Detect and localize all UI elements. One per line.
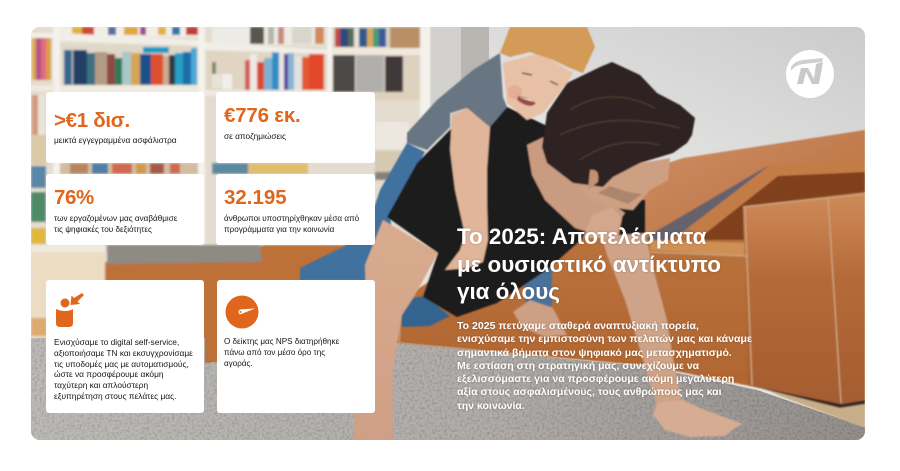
stat caption: άνθρωποι υποστηρίχθηκαν μέσα από (224, 214, 359, 223)
boy's jeans (300, 143, 425, 280)
rug (31, 338, 865, 440)
intro paragraph: σημαντικά βήματα στον ψηφιακό μας μετασχηματισμό. (457, 347, 732, 359)
body text (224, 337, 339, 368)
boy's t-shirt (407, 53, 507, 150)
intro paragraph: Το 2025 πετύχαμε σταθερά αναπτυξιακή πορεία, (457, 320, 699, 332)
heading (457, 224, 721, 304)
card: employees upskilled (46, 174, 204, 245)
stat caption: μεικτά εγγεγραμμένα ασφάλιστρα (54, 135, 177, 145)
stat caption: τις ψηφιακές του δεξιότητες (54, 225, 152, 234)
stat value: €776 εκ. (224, 104, 301, 127)
father's black t-shirt (387, 107, 645, 317)
card: NPS (217, 280, 375, 413)
stat caption (224, 214, 359, 234)
father's neck (527, 135, 625, 238)
body text: τις υποδομές μας με αυτοματισμούς, (54, 359, 189, 369)
stat caption: σε αποζημιώσεις (224, 131, 286, 141)
icon: orange gauge (226, 296, 258, 328)
intro paragraph: εξελισσόμαστε για να προσφέρουμε ακόμη μεγαλύτερη (457, 373, 734, 385)
body text: εξυπηρέτηση στους πελάτες μας. (54, 391, 176, 401)
father's arm left (353, 220, 438, 440)
card: claims paid (216, 92, 375, 163)
father's face (580, 158, 670, 210)
father's arm right (600, 225, 683, 405)
intro paragraph (456, 320, 752, 412)
body text: ταχύτερη και απλούστερη (54, 380, 148, 390)
card: people supported (216, 174, 375, 245)
stat caption: των εργαζομένων μας αναβάθμισε (54, 214, 177, 223)
stat caption: προγράμματα για την κοινωνία (224, 225, 334, 234)
bookshelf (31, 27, 430, 277)
body text: αξιοποιήσαμε ΤΝ και εκσυγχρονίσαμε (54, 348, 193, 358)
boy's hand on shoulder (583, 207, 622, 238)
card: digital self-service (46, 280, 204, 413)
intro paragraph: Με εστίαση στη στρατηγική μας, συνεχίζουμε να (457, 360, 699, 372)
father's hair (542, 62, 695, 187)
card: gross written premiums (46, 92, 204, 163)
stat value: 76% (54, 186, 94, 209)
icon: person with incoming arrow (56, 293, 84, 327)
intro paragraph: την κοινωνία. (457, 400, 525, 412)
right sofa (400, 130, 865, 428)
stat value: >€1 δισ. (54, 109, 130, 132)
boy's hair (500, 27, 595, 73)
logo: round white badge with N mark (786, 50, 834, 98)
intro paragraph: ενισχύσαμε την εμπιστοσύνη των πελατών μας και κάναμε (457, 333, 752, 345)
figures: father doing a push-up with son on his back (300, 27, 743, 440)
boy's face (503, 53, 573, 120)
stat value: 32.195 (224, 186, 287, 209)
heading: Το 2025: Αποτελέσματα (457, 224, 706, 249)
stat caption (54, 214, 178, 234)
body text: Ο δείκτης μας NPS διατηρήθηκε (224, 337, 339, 346)
boy's arm (445, 108, 490, 270)
heading: με ουσιαστικό αντίκτυπο (457, 252, 721, 276)
intro paragraph: αξία στους ασφαλισμένους, τους ανθρώπους μας και (457, 386, 722, 398)
body text: αγοράς. (224, 359, 253, 368)
body text (54, 337, 193, 401)
floor and left sofa (31, 245, 400, 365)
heading: για όλους (457, 279, 560, 304)
body text: πάνω από τον μέσο όρο της (224, 348, 325, 357)
body text: ώστε να προσφέρουμε ακόμη (54, 369, 164, 379)
body text: Ενισχύσαμε το digital self-service, (54, 337, 179, 347)
